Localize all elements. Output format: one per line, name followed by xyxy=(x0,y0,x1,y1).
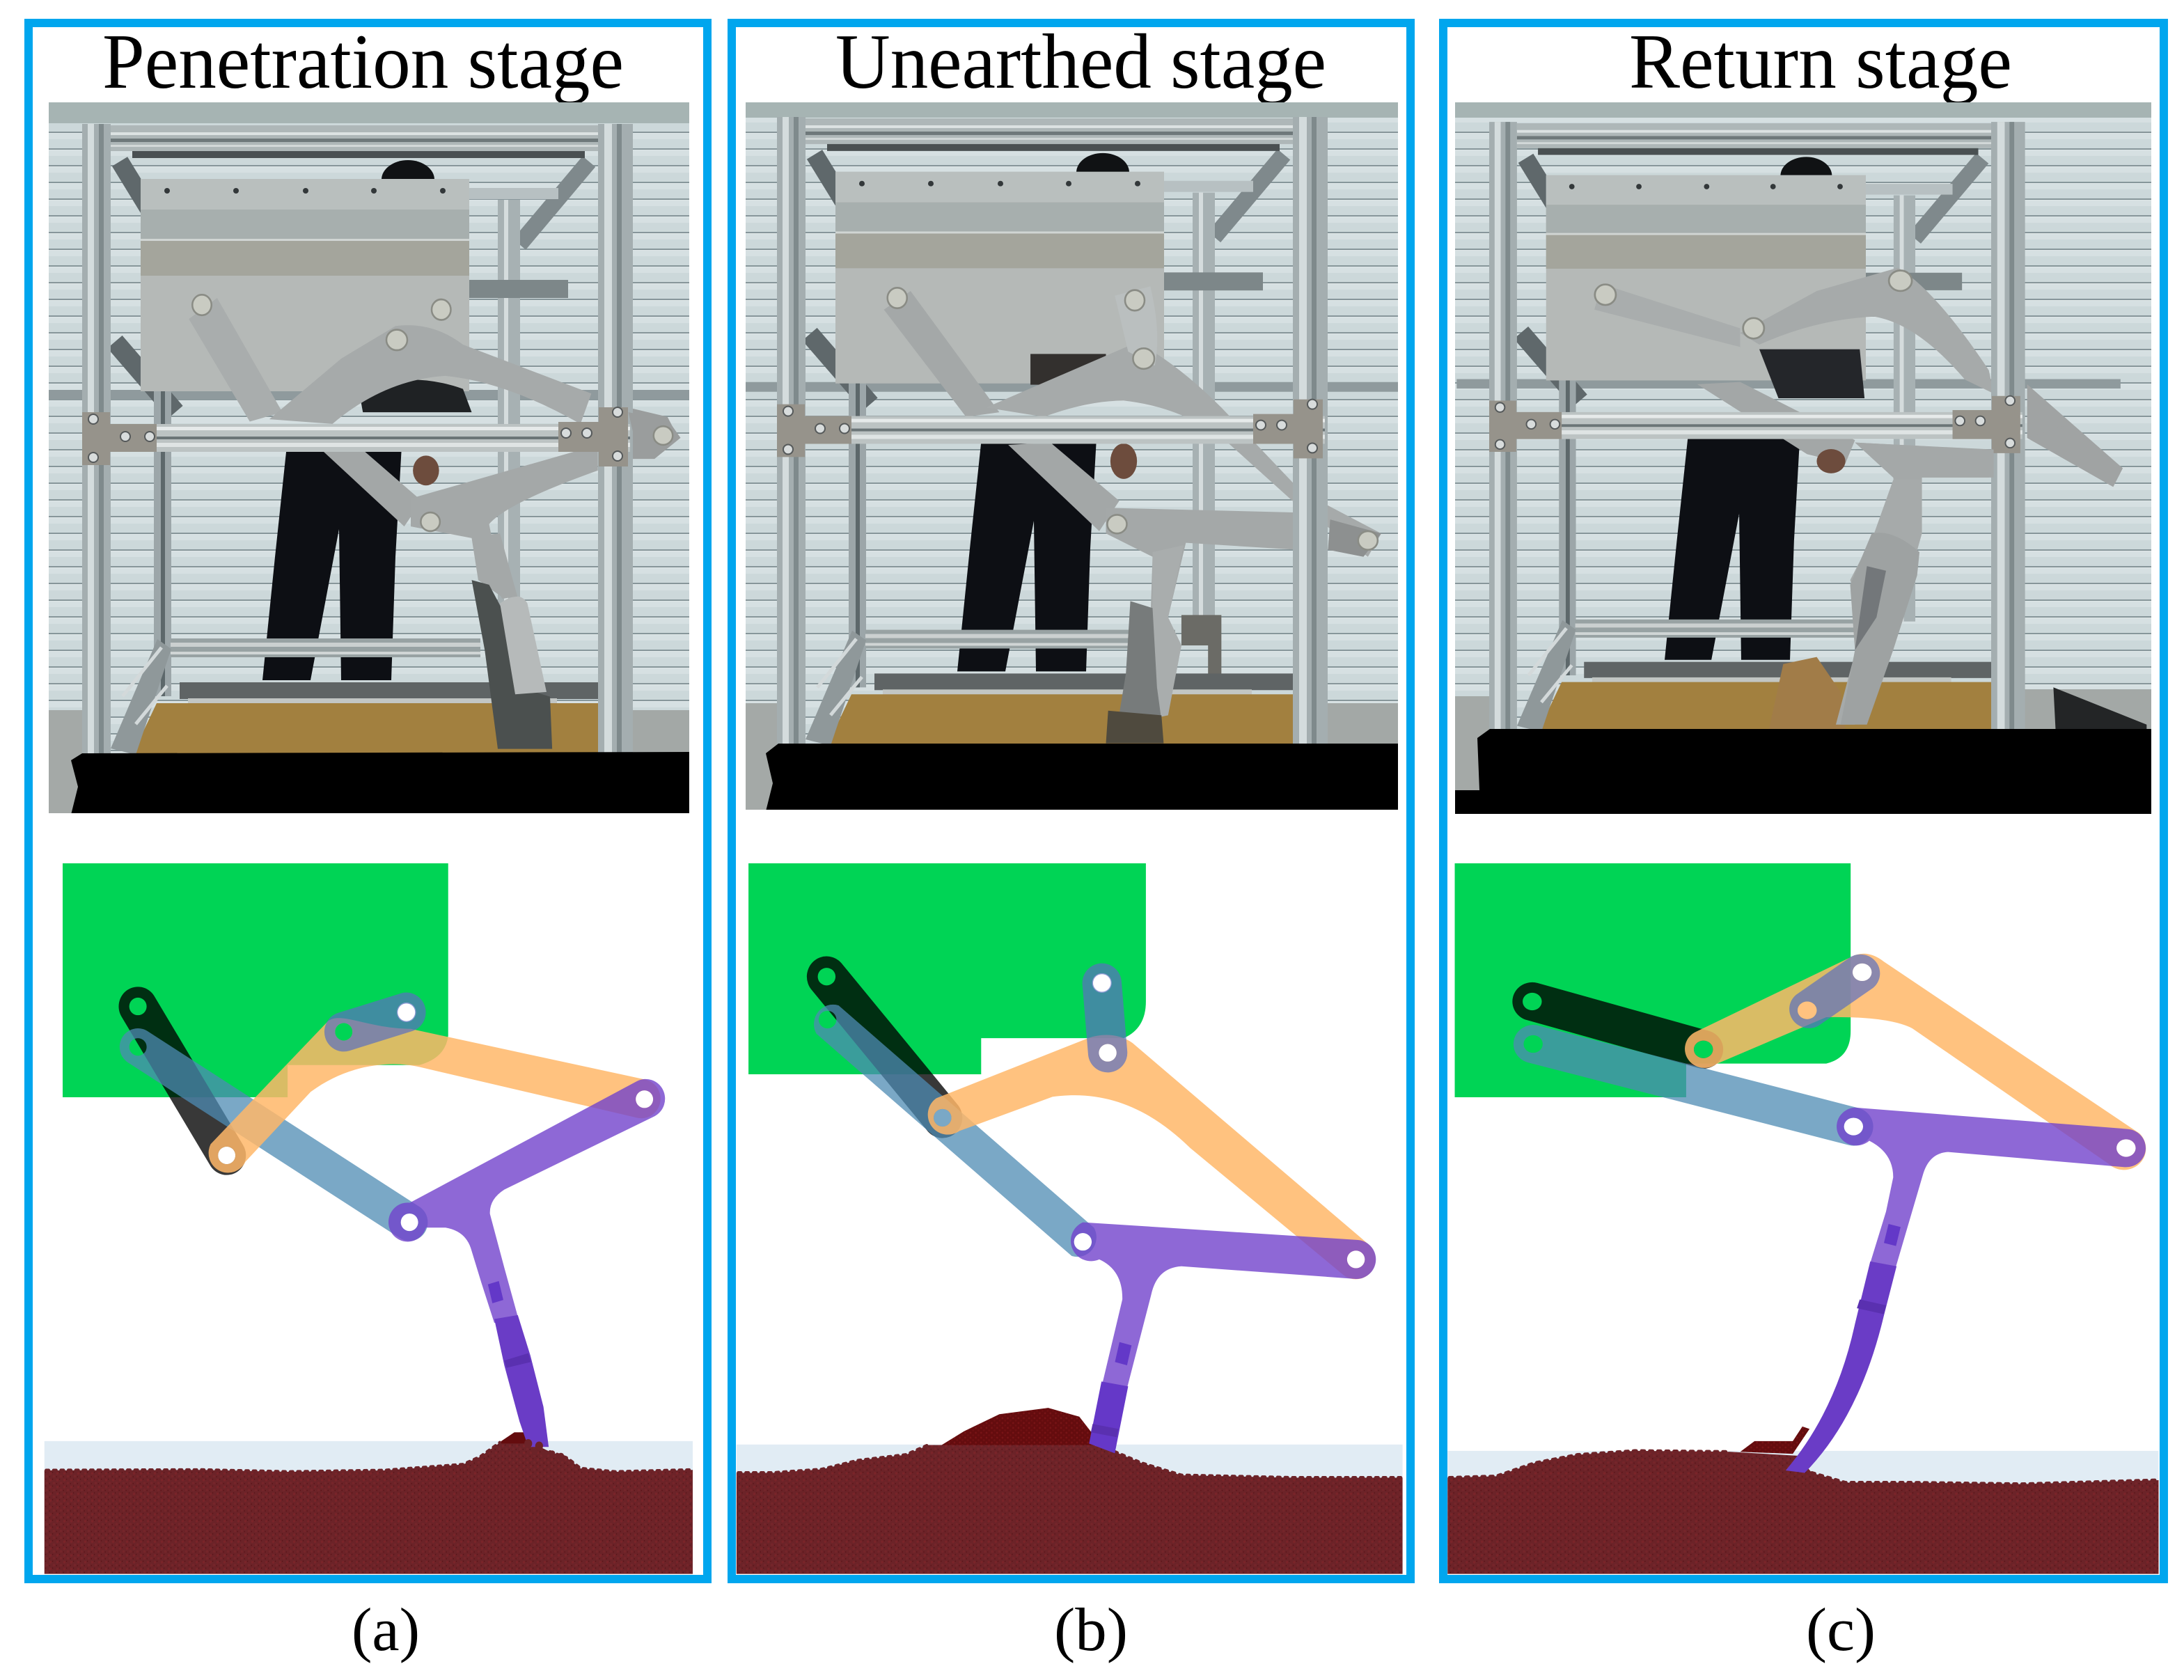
heading: penetration stage: Penetration stage xyxy=(102,19,624,105)
simulation: unearthed stage xyxy=(737,863,1403,1574)
orange coupler link xyxy=(928,1035,1376,1279)
photo: test rig during penetration xyxy=(49,102,731,815)
frame: panel b border xyxy=(732,23,1411,1579)
small link xyxy=(324,993,426,1051)
purple T-shaped shovel arm xyxy=(1837,1108,2146,1268)
blue rocker link xyxy=(814,1005,1097,1257)
orange coupler link xyxy=(209,1018,661,1172)
soil layer xyxy=(737,1408,1403,1574)
caption (b): (b) xyxy=(1054,1596,1128,1664)
small link joint hole xyxy=(1798,1002,1816,1019)
photo: test rig during unearthing xyxy=(744,102,1426,811)
black crank link xyxy=(118,987,246,1175)
panel: return stage xyxy=(1443,19,2164,1664)
machine frame plate xyxy=(63,863,448,1097)
small link xyxy=(1083,964,1127,1072)
orange coupler link xyxy=(1685,954,2146,1170)
black crank link xyxy=(1512,982,1723,1069)
photo: test rig during return xyxy=(1455,102,2151,814)
blue rocker link xyxy=(120,1028,427,1241)
soil layer xyxy=(1447,1427,2159,1574)
shovel blade xyxy=(488,1281,549,1447)
machine frame plate xyxy=(748,863,1146,1074)
heading: return stage: Return stage xyxy=(1629,19,2012,105)
panel: penetration stage xyxy=(29,19,731,1664)
caption (a): (a) xyxy=(352,1596,420,1664)
small link xyxy=(1789,955,1880,1028)
caption (c): (c) xyxy=(1806,1596,1876,1664)
purple T-shaped shovel arm xyxy=(1071,1223,1376,1388)
simulation: return stage xyxy=(1447,863,2159,1574)
heading: unearthed stage: Unearthed stage xyxy=(835,19,1326,105)
frame: panel a border xyxy=(29,23,707,1579)
shovel blade xyxy=(1786,1224,1901,1473)
displaced soil particles xyxy=(524,1439,565,1461)
machine frame plate xyxy=(1455,863,1851,1097)
soil layer xyxy=(45,1432,693,1574)
blue rocker link xyxy=(1514,1025,1873,1146)
simulation: penetration stage xyxy=(45,863,693,1574)
black crank link xyxy=(807,957,962,1138)
shovel blade xyxy=(1089,1342,1131,1453)
panel: unearthed stage xyxy=(732,19,1426,1664)
frame: panel c border xyxy=(1443,23,2164,1579)
purple T-shaped shovel arm xyxy=(388,1079,665,1323)
